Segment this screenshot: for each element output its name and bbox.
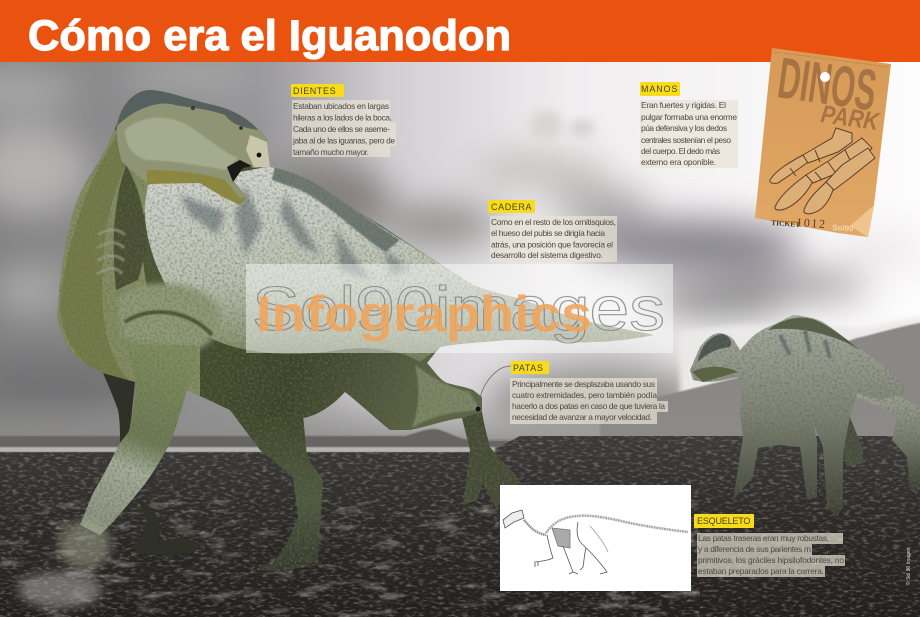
text: dientes: Estaban ubicados en largas	[293, 101, 389, 111]
text: esqueleto: Las patas traseras eran muy robustas,	[698, 533, 829, 543]
central leg	[230, 410, 323, 572]
third dinosaur, far right	[840, 379, 920, 490]
text: dientes: hileras a los lados de la boca.	[293, 112, 392, 122]
ticket number: TICKET	[771, 218, 801, 229]
text: cadera: desarrollo del sistema digestivo.	[491, 250, 603, 260]
ticket: Dinos Park	[755, 46, 891, 237]
tag: manos: MANOS	[641, 84, 678, 94]
text: manos: del cuerpo. El dedo más	[641, 146, 720, 156]
head	[117, 90, 270, 205]
hind thigh highlight	[412, 365, 480, 428]
callout: manos	[640, 82, 738, 168]
text: patas	[510, 378, 668, 424]
text: manos: pulgar formaba una enorme	[641, 112, 737, 122]
tag: esqueleto: ESQUELETO	[697, 516, 751, 526]
panel: skeleton drawing	[500, 485, 691, 591]
text: manos: púa defensiva y los dedos	[641, 123, 727, 133]
icon: hand bones	[770, 128, 875, 214]
bright strip under clouds and far mountains	[680, 316, 920, 395]
text: manos: centrales sostenían el peso	[641, 135, 731, 145]
text: dientes: tamaño mucho mayor.	[293, 147, 369, 157]
text: cadera	[490, 216, 617, 262]
shoulder	[117, 283, 220, 350]
callout: patas	[476, 361, 668, 424]
text: cadera: Como en el resto de los ornitisquios,	[491, 217, 616, 227]
text: dientes: Cada uno de ellos se aseme-	[293, 124, 390, 134]
text: esqueleto: estaban preparados para la carrera.	[698, 566, 824, 576]
tag: dientes: DIENTES	[293, 86, 336, 96]
skeleton	[503, 510, 688, 574]
text: cadera: el hueso del pubis se dirigía hacia	[491, 228, 605, 238]
text: patas: cuatro extremidades, pero también podía	[512, 390, 657, 400]
callout: cadera	[488, 200, 617, 262]
text: esqueleto: primitivos, los gráciles hipsilofodontes, no	[698, 555, 844, 565]
text: patas: hacerlo a dos patas en caso de que tuviera la	[512, 401, 665, 411]
neck	[50, 130, 200, 400]
title band	[0, 0, 920, 62]
watermark: Sol90images Infographics	[246, 264, 673, 353]
text: manos	[640, 100, 738, 168]
ticket: Dinos Park: PARK	[819, 100, 882, 136]
text: manos: externo era oponible.	[641, 157, 716, 167]
second dinosaur, background	[690, 315, 910, 517]
rear left leg	[103, 373, 200, 555]
text: esqueleto	[697, 533, 845, 577]
large iguanodon	[18, 85, 660, 608]
text: patas: Principalmente se desplazaba usando sus	[512, 379, 655, 389]
tag: esqueleto	[694, 514, 754, 528]
text: dientes	[292, 100, 396, 157]
tag: cadera: CADERA	[491, 202, 532, 212]
text: manos: Eran fuertes y rígidas. El	[641, 100, 726, 110]
text: esqueleto: y a diferencia de sus parientes m	[698, 544, 811, 554]
ticket: Dinos Park: 1012	[796, 215, 827, 231]
water splash	[18, 521, 111, 608]
photo credit: © Sol 90 Images	[905, 547, 912, 585]
torso, tail and hind foot	[50, 85, 660, 525]
title: Cómo era el Iguanodon	[28, 12, 511, 60]
watermark: Sol90images Infographics: Sol90images	[252, 275, 665, 344]
ticket: Dinos Park: Sol90	[832, 223, 854, 234]
text: patas: necesidad de avanzar a mayor velocidad.	[512, 412, 652, 422]
front leg	[80, 345, 197, 535]
pointer line	[476, 366, 511, 411]
tag: patas	[511, 361, 549, 374]
text: cadera: atrás, una posición que favorecía el	[491, 240, 613, 250]
callout: dientes	[257, 84, 396, 157]
callout: esqueleto	[694, 514, 845, 577]
text: dientes: jaba al de las iguanas, pero de	[292, 136, 395, 146]
tag: patas: PATAS	[513, 363, 544, 373]
watermark: Sol90images Infographics: Infographics	[256, 286, 592, 342]
